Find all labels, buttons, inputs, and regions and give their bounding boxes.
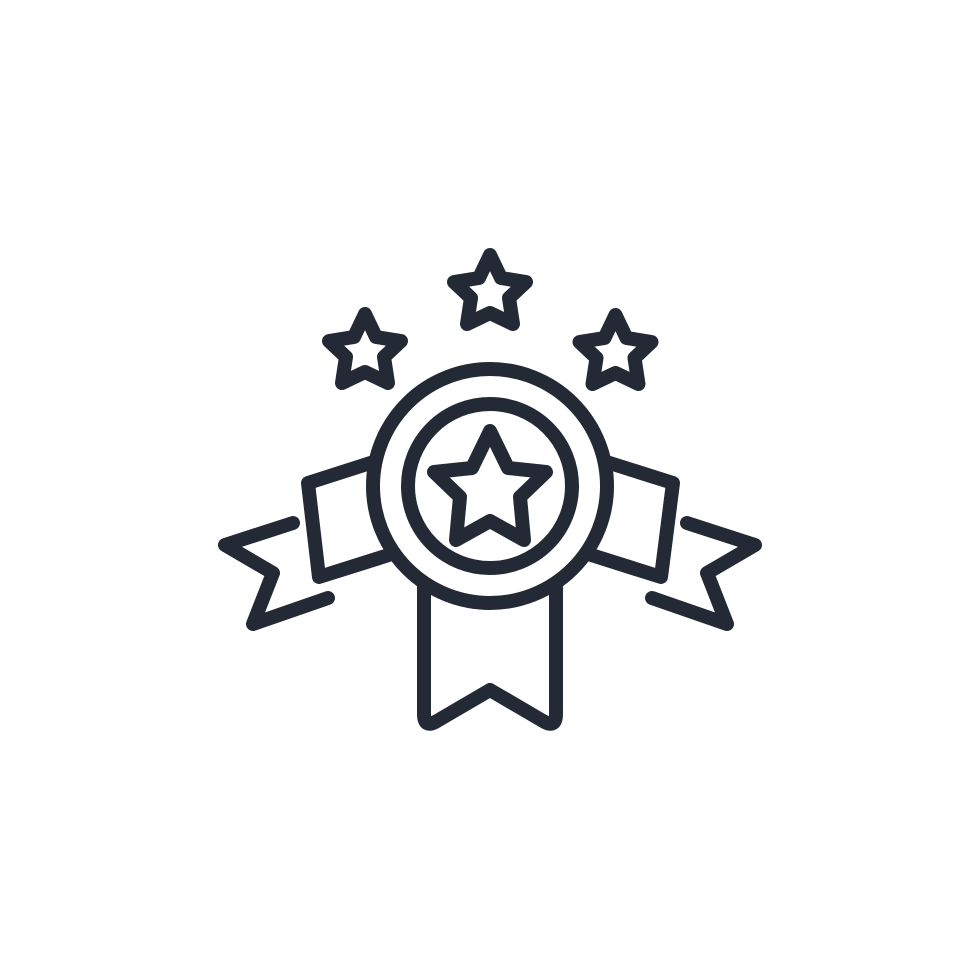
hanging ribbon tail bbox=[424, 583, 556, 724]
medal inner ring bbox=[408, 404, 572, 568]
left ribbon end bbox=[225, 523, 328, 624]
medal centre star bbox=[434, 431, 546, 540]
star: left bbox=[329, 314, 401, 383]
left ribbon fold bbox=[308, 462, 395, 577]
star: top bbox=[454, 255, 526, 324]
right ribbon end bbox=[652, 523, 755, 624]
star: right bbox=[580, 315, 652, 384]
medal outer ring bbox=[373, 369, 607, 603]
right ribbon fold bbox=[585, 462, 673, 577]
